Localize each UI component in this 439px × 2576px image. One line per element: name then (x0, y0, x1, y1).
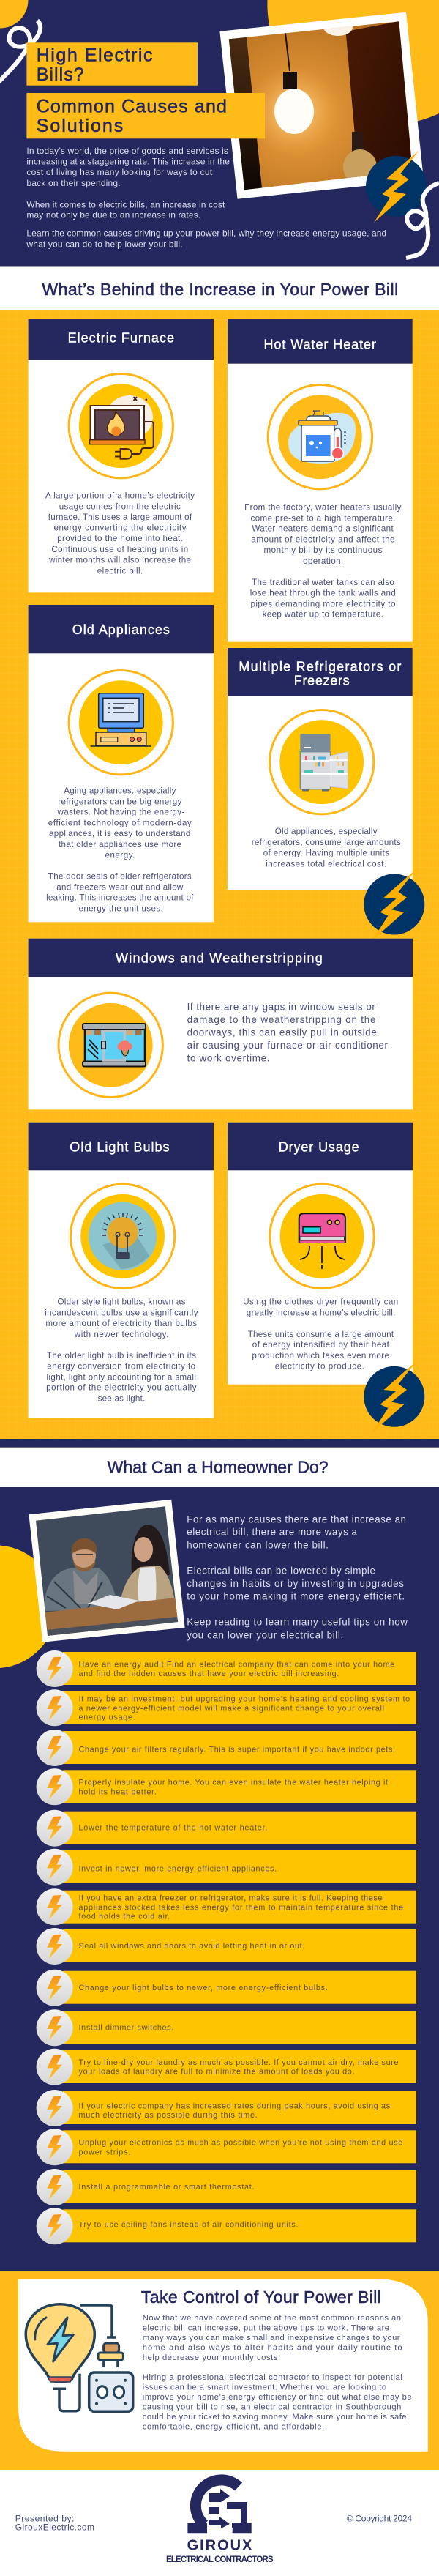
text: light bulbs (45, 1298, 198, 1404)
tip 7: If you have an extra freezer or refrigerator, make sure it is full. Keeping these (79, 1894, 382, 1903)
tip 6 (37, 1849, 416, 1886)
text: dryer: production which takes even more (252, 1351, 389, 1360)
text: take control: causing your bill to rise, an electrical contractor in Southborough (143, 2403, 401, 2412)
panel: Multiple Refrigerators or Freezers: Freezers (294, 674, 350, 688)
text: take control: could be your ticket to saving money. Make sure your home is safe, (143, 2413, 409, 2421)
text: windows: doorways, this can easily pull in outside (187, 1027, 377, 1038)
text: water heater: The traditional water tanks can also (252, 578, 394, 587)
tip 2: It may be an investment, but upgrading your home’s heating and cooling system to (79, 1695, 410, 1704)
icon: lightning badge middle (364, 868, 424, 941)
text: old appliances: efficient technology of modern-day (48, 819, 192, 828)
panel: Dryer Usage: Dryer Usage (279, 1140, 359, 1155)
heading: What's Behind: What’s Behind the Increase in Your Power Bill (42, 280, 398, 299)
text: water heater: From the factory, water heaters usually (244, 502, 402, 512)
heading: What Can a Homeowner Do: What Can a Homeowner Do? (108, 1458, 329, 1477)
text: take control: improve your home’s energy efficiency or find out what else may be (143, 2393, 412, 2402)
title box: High Electric Bills (26, 42, 198, 86)
tip 14: Install a programmable or smart thermostat. (79, 2183, 255, 2192)
text: windows: to work overtime. (187, 1053, 269, 1064)
decorative circle top right (267, 0, 439, 124)
squiggle right (406, 183, 439, 258)
text: homeowner intro (187, 1514, 408, 1640)
tip 10 (37, 2009, 416, 2046)
intro text: back on their spending. (26, 178, 121, 188)
intro text: may not only be due to an increase in rates. (26, 209, 200, 220)
heading: Take Control: Take Control of Your Power Bill (141, 2287, 381, 2307)
text: water heater: pipes demanding more electricity to (250, 599, 395, 608)
tip 12 (37, 2090, 416, 2126)
text: furnace: energy converting the electricity (54, 524, 187, 533)
tip 10: Install dimmer switches. (79, 2024, 173, 2033)
tip 14 (37, 2169, 416, 2205)
text: furnace: winter months will also increase the (48, 555, 191, 565)
text: take control: issues can be a smart investment. Whether you are looking to (143, 2383, 386, 2392)
tip 13: Unplug your electronics as much as possible when you’re not using them and use (79, 2139, 402, 2148)
tip 11 (37, 2049, 416, 2085)
text: old appliances: Aging appliances, especially (64, 786, 176, 795)
presented by: GirouxElectric.com (15, 2523, 94, 2533)
tip 11: Try to line-dry your laundry as much as possible. If you cannot air dry, make sure (79, 2058, 398, 2067)
text: windows: air causing your furnace or air conditioner (187, 1040, 389, 1051)
icon: lightning badge (366, 150, 427, 223)
tip 1 (37, 1650, 416, 1687)
icon: bulb and plug (26, 2304, 133, 2411)
text: refrigerators: increases total electrical cost. (266, 859, 386, 868)
text: water heater: lose heat through the tank walls and (250, 588, 396, 598)
tip 13: power strips. (79, 2148, 130, 2156)
intro text: increasing at a staggering rate. This increase in the (26, 157, 230, 167)
text: take control (143, 2314, 412, 2431)
tip 12: If your electric company has increased rates during peak hours, avoid using as (79, 2102, 391, 2110)
text: water heater: keep water up to temperature. (263, 610, 383, 619)
footer (15, 2480, 412, 2564)
tip 9: Change your light bulbs to newer, more energy-efficient bulbs. (79, 1984, 328, 1992)
squiggle top left (0, 21, 40, 82)
logo: Giroux Electrical Contractors (166, 2480, 274, 2564)
tip 2: energy usage. (79, 1713, 135, 1722)
text: light bulbs: incandescent bulbs use a significantly (45, 1309, 198, 1318)
tip 3: Change your air filters regularly. This is super important if you have indoor pets. (79, 1746, 395, 1754)
title box: Common Causes and Solutions (26, 93, 265, 138)
tip 13 (37, 2129, 416, 2165)
title box: Common Causes and Solutions: Common Causes and (37, 96, 227, 116)
text: light bulbs: more amount of electricity than bulbs (45, 1319, 197, 1328)
panel: Hot Water Heater: Hot Water Heater (263, 338, 376, 352)
decorative corner circle top left (0, 0, 28, 28)
text: homeowner intro: homeowner can lower the bill. (187, 1539, 329, 1550)
icon: dryer unit (270, 1184, 374, 1289)
text: water heater (244, 502, 402, 619)
text: homeowner intro: electrical bill, there are more ways a (187, 1527, 358, 1538)
panel: causes background (0, 310, 439, 1439)
text: furnace: usage comes from the electric (59, 502, 181, 512)
text: light bulbs: portion of the electricity you actually (46, 1383, 197, 1393)
text: light bulbs: see as light. (98, 1394, 145, 1404)
icon: old computer (69, 671, 173, 775)
text: old appliances: wasters. Not having the energy- (57, 808, 184, 817)
logo: Giroux Electrical Contractors: GIROUX (187, 2538, 252, 2554)
tip 2 (37, 1689, 416, 1726)
presented by: Presented by: (15, 2513, 74, 2523)
intro text: Learn the common causes driving up your power bill, why they increase energy usage, and (26, 228, 386, 238)
text: dryer: of energy intensified by their heat (252, 1340, 390, 1350)
text: water heater: amount of electricity and affect the (251, 535, 395, 545)
text: light bulbs: energy conversion from electricity to (47, 1361, 195, 1371)
logo: Giroux Electrical Contractors: ELECTRICAL CONTRACTORS (166, 2555, 274, 2564)
text: windows: damage to the weatherstripping on the (187, 1014, 376, 1025)
panel: header (0, 0, 439, 267)
text: furnace: Continuous use of heating units in (51, 545, 188, 554)
copyright: © Copyright 2024 (347, 2513, 412, 2523)
tip 7 (37, 1888, 416, 1925)
panel: Old Light Bulbs: Old Light Bulbs (70, 1140, 170, 1155)
title box: High Electric Bills: Bills? (37, 64, 84, 85)
icon: refrigerator (269, 710, 374, 814)
intro text: In today’s world, the price of goods and services is (26, 146, 228, 156)
text: take control: electric bill can increase, put the above tips to work. There are (143, 2324, 389, 2333)
text: homeowner intro: to your home making it more energy efficient. (187, 1590, 405, 1601)
presented by (15, 2513, 94, 2533)
text: windows: If there are any gaps in window seals or (187, 1002, 375, 1013)
tip 8: Seal all windows and doors to avoid letting heat in or out. (79, 1942, 304, 1951)
title box: Common Causes and Solutions: Solutions (37, 116, 123, 136)
icon: light bulb (70, 1184, 175, 1289)
text: dryer (243, 1298, 398, 1371)
panel: Electric Furnace: Electric Furnace (68, 331, 174, 346)
text: refrigerators: of energy. Having multiple units (263, 848, 389, 857)
panel: Electric Furnace (29, 319, 214, 592)
text: refrigerators: refrigerators, consume large amounts (252, 838, 401, 847)
icon: lightning badge lower (364, 1360, 424, 1433)
tip 9 (37, 1970, 416, 2006)
text: dryer: electricity to produce. (275, 1361, 364, 1371)
text: take control: home and also ways to alter habits and your daily routine to (143, 2344, 402, 2353)
text: dryer: Using the clothes dryer frequently can (243, 1298, 398, 1307)
text: furnace: A large portion of a home’s electricity (45, 491, 195, 501)
text: take control: Hiring a professional electrical contractor to inspect for potential (143, 2373, 402, 2382)
text: water heater: Water heaters demand a significant (252, 524, 394, 534)
tip 8 (37, 1928, 416, 1965)
tip 4 (37, 1768, 416, 1805)
text: old appliances: and freezers wear out and allow (56, 882, 184, 892)
panel: Take Control (0, 2271, 439, 2470)
text: old appliances: that older appliances use more (59, 840, 181, 849)
text: homeowner intro: you can lower your electrical bill. (187, 1629, 343, 1640)
text: dryer: These units consume a large amount (248, 1330, 394, 1339)
text: take control: many ways you can make small and inexpensive changes to your (143, 2334, 400, 2342)
intro text (26, 146, 386, 249)
tip 7: appliances stocked takes less energy for them to maintain temperature since the (79, 1903, 403, 1912)
text: dryer: greatly increase a home’s electric bill. (247, 1309, 395, 1318)
panel: Old Appliances (29, 605, 214, 922)
intro text: cost of living has many looking for ways to cut (26, 167, 213, 177)
tip 4: Properly insulate your home. You can even insulate the water heater helping it (79, 1779, 388, 1787)
text: light bulbs: light, light only accounting for a small (47, 1372, 196, 1382)
tip 5 (37, 1810, 416, 1847)
photo: couple reviewing bills (29, 1500, 185, 1642)
intro text: what you can do to help lower your bill. (26, 239, 183, 249)
text: old appliances: appliances, it is easy to understand (49, 829, 190, 838)
tip 11: your loads of laundry are full to minimize the amount of loads you do. (79, 2068, 354, 2077)
icon: furnace (69, 373, 173, 478)
text: take control: help decrease your monthly costs. (143, 2353, 280, 2362)
text: water heater: monthly bill by its continuous (263, 546, 383, 555)
text: water heater: come pre-set to a high temperature. (250, 513, 395, 523)
text: light bulbs: Older style light bulbs, known as (57, 1298, 186, 1307)
navy divider strip (0, 1439, 439, 1448)
panel: Old Light Bulbs (29, 1123, 214, 1418)
panel: Multiple Refrigerators or Freezers (228, 648, 413, 890)
photo: hanging light bulbs (220, 12, 424, 199)
text: water heater: operation. (303, 556, 343, 566)
tip 15 (37, 2208, 416, 2244)
text: homeowner intro: changes in habits or by investing in upgrades (187, 1578, 404, 1589)
text: homeowner intro: For as many causes there are that increase an (187, 1514, 406, 1525)
tip 15: Try to use ceiling fans instead of air conditioning units. (79, 2220, 298, 2229)
tip 4: hold its heat better. (79, 1787, 157, 1796)
intro text: When it comes to electric bills, an increase in cost (26, 199, 225, 209)
tip 12: much electricity as possible during this time. (79, 2111, 258, 2120)
text: light bulbs: with newer technology. (74, 1330, 168, 1339)
text: old appliances: The door seals of older refrigerators (48, 871, 192, 881)
tip 6: Invest in newer, more energy-efficient appliances. (79, 1864, 277, 1873)
text: refrigerators (252, 827, 401, 868)
tip 1: and find the hidden causes that have your electric bill increasing. (79, 1669, 339, 1678)
text: furnace: electric bill. (97, 566, 143, 576)
tip 3 (37, 1730, 416, 1766)
tip 2: a newer energy-efficient model will make a significant change to your overall (79, 1704, 384, 1713)
text: homeowner intro: Electrical bills can be lowered by simple (187, 1566, 375, 1577)
icon: window (59, 993, 162, 1098)
text: furnace: provided to the home into heat. (57, 534, 183, 543)
panel: homeowner tips (0, 1487, 439, 2271)
decorative yellow circle (0, 1545, 57, 1668)
text: furnace: furnace. This uses a large amount of (48, 513, 192, 522)
tip 7: food holds the cold air. (79, 1913, 170, 1921)
text: old appliances: refrigerators can be big energy (58, 797, 182, 806)
text: old appliances: energy the unit uses. (79, 904, 163, 914)
panel: Old Appliances: Old Appliances (72, 622, 170, 637)
text: furnace (45, 491, 195, 576)
text: light bulbs: The older light bulb is inefficient in its (47, 1351, 196, 1360)
text: refrigerators: Old appliances, especially (275, 827, 378, 836)
text: homeowner intro: Keep reading to learn many useful tips on how (187, 1616, 408, 1627)
text: take control: Now that we have covered some of the most common reasons an (143, 2314, 401, 2323)
text: windows (187, 1002, 389, 1064)
panel: Multiple Refrigerators or Freezers: Multiple Refrigerators or (239, 660, 401, 674)
tip 1: Have an energy audit.Find an electrical company that can come into your home (79, 1660, 394, 1669)
panel: Dryer Usage (228, 1123, 413, 1385)
tip 5: Lower the temperature of the hot water heater. (79, 1824, 267, 1833)
panel: Windows and Weatherstripping (29, 939, 413, 1109)
title box: High Electric Bills: High Electric (37, 45, 153, 65)
text: take control: comfortable, energy-efficient, and affordable. (143, 2422, 324, 2431)
panel: Hot Water Heater (228, 319, 413, 642)
text: old appliances: leaking. This increases the amount of (46, 893, 194, 903)
panel: Windows and Weatherstripping: Windows and Weatherstripping (116, 950, 323, 965)
icon: water heater (268, 385, 372, 489)
text: old appliances: energy. (105, 850, 135, 860)
text: old appliances (46, 786, 194, 914)
